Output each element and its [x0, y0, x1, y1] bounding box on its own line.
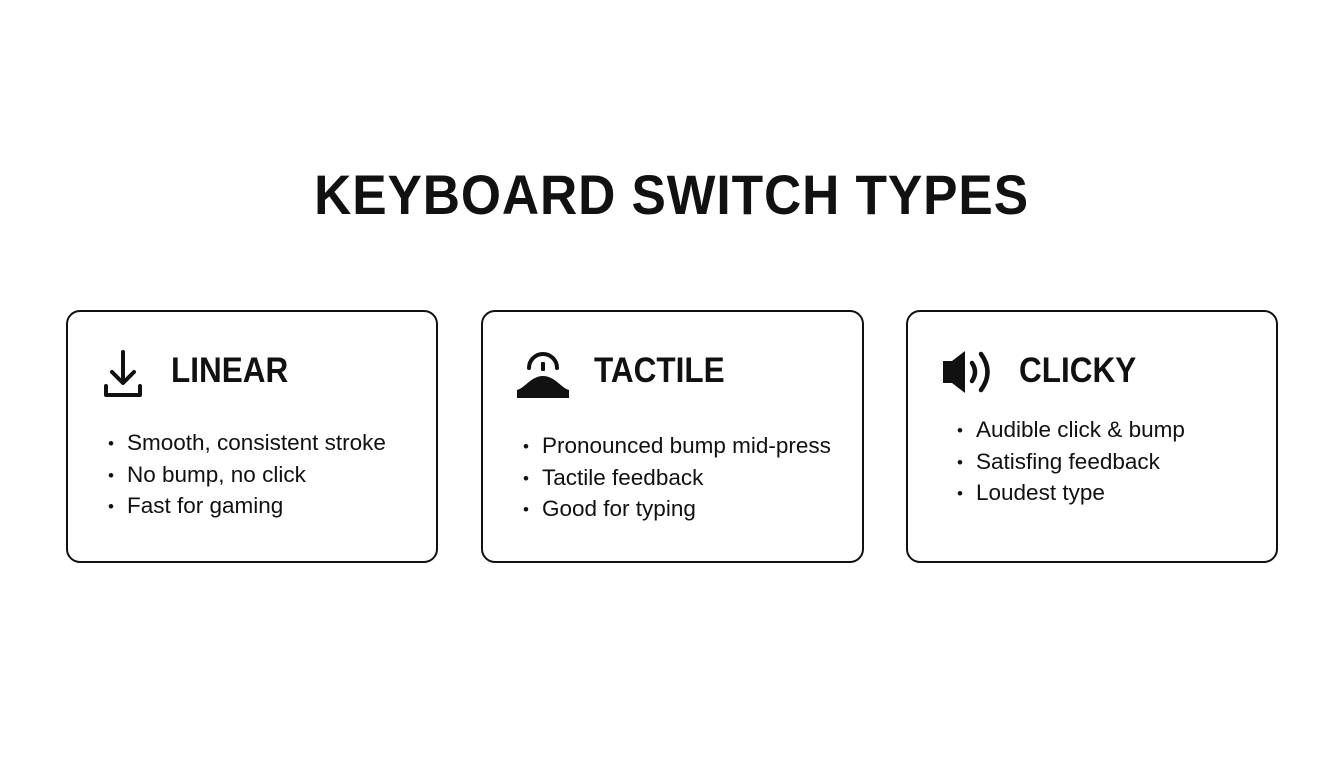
heading: tactile: TACTILE — [594, 351, 725, 390]
icon: download arrow — [104, 350, 142, 397]
panel: tactile — [481, 310, 864, 563]
bullets: clicky: Loudest type — [976, 480, 1105, 505]
bullets: tactile: Good for typing — [542, 496, 696, 521]
bullets: linear — [108, 430, 386, 518]
bullets: linear: No bump, no click — [127, 462, 306, 486]
bullets: tactile: Pronounced bump mid-press — [542, 433, 831, 458]
heading: clicky: CLICKY — [1019, 351, 1136, 390]
bullets: linear: Fast for gaming — [127, 493, 283, 518]
bullets: clicky: Satisfing feedback — [976, 448, 1160, 474]
bullets: linear: Smooth, consistent stroke — [127, 430, 386, 455]
panel: clicky — [906, 310, 1278, 563]
panel: linear — [66, 310, 438, 563]
bullets: tactile — [524, 433, 831, 521]
bullets: clicky: Audible click & bump — [976, 417, 1185, 442]
icon: speaker — [943, 351, 990, 393]
title: KEYBOARD SWITCH TYPES — [315, 163, 1029, 226]
icon: tactile bump — [517, 352, 569, 398]
bullets: clicky — [958, 417, 1185, 505]
bullets: tactile: Tactile feedback — [542, 464, 703, 490]
heading: linear: LINEAR — [171, 351, 288, 390]
